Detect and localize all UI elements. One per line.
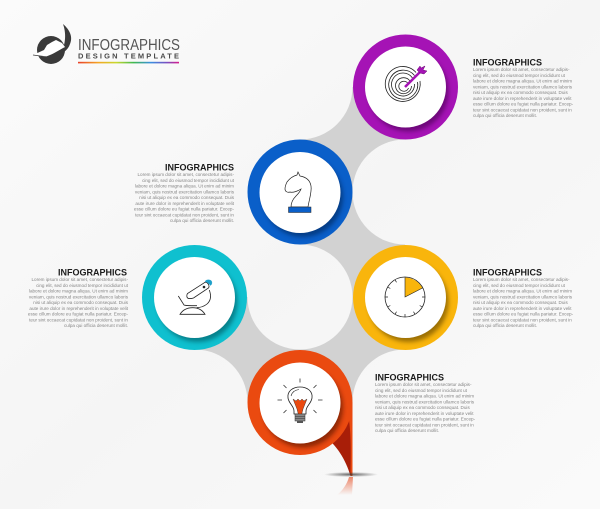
body: culpa qui officia deserunt mollit. bbox=[473, 323, 537, 328]
body: aute irure dolor in reprehenderit in voluptate velit bbox=[375, 411, 474, 416]
body: nisi ut aliquip ex ea commodo consequat. Duis bbox=[473, 300, 568, 305]
body: esse cillum dolore eu fugiat nulla pariatur. Excep- bbox=[28, 312, 128, 316]
step 3: teal ring bbox=[142, 245, 247, 350]
body: culpa qui officia deserunt mollit. bbox=[170, 218, 234, 223]
body bbox=[473, 67, 574, 118]
step 2: blue ring bbox=[248, 140, 352, 244]
body: veniam, quis nostrud exercitation ullamco laboris bbox=[375, 399, 475, 404]
heading: INFOGRAPHICS bbox=[375, 372, 444, 382]
body: labore et dolore magna aliqua. Ut enim ad minim bbox=[473, 288, 572, 294]
text block: step 2 bbox=[134, 162, 235, 223]
heading: INFOGRAPHICS bbox=[165, 162, 234, 172]
body: Lorem ipsum dolor sit amet, consectetur adipis- bbox=[473, 277, 570, 282]
pin reflection bbox=[337, 477, 353, 495]
body: labore et dolore magna aliqua. Ut enim ad minim bbox=[473, 78, 572, 84]
body: teur sint occaecat cupidatat non proident, sunt in bbox=[29, 317, 128, 322]
body: culpa qui officia deserunt mollit. bbox=[375, 428, 439, 433]
body: cing elit, sed do eiusmod tempor incididunt ut bbox=[36, 283, 129, 288]
connector band: blue to yellow bbox=[300, 192, 405, 297]
pin shadow bbox=[324, 472, 378, 477]
body: veniam, quis nostrud exercitation ullamco laboris bbox=[135, 189, 235, 194]
body: nisi ut aliquip ex ea commodo consequat. Duis bbox=[33, 300, 129, 305]
body: nisi ut aliquip ex ea commodo consequat. Duis bbox=[473, 90, 568, 95]
body: labore et dolore magna aliqua. Ut enim ad minim bbox=[29, 288, 128, 294]
body: veniam, quis nostrud exercitation ullamco laboris bbox=[473, 84, 573, 89]
body bbox=[28, 277, 129, 328]
body: aute irure dolor in reprehenderit in voluptate velit bbox=[473, 306, 572, 311]
body bbox=[134, 172, 235, 223]
logo bbox=[33, 24, 180, 64]
body: Lorem ipsum dolor sit amet, consectetur adipis- bbox=[31, 277, 128, 282]
text block: step 5 bbox=[375, 372, 476, 433]
body: nisi ut aliquip ex ea commodo consequat. Duis bbox=[375, 405, 470, 410]
body: teur sint occaecat cupidatat non proident, sunt in bbox=[135, 212, 234, 217]
body: teur sint occaecat cupidatat non proident, sunt in bbox=[375, 422, 474, 427]
icon: microscope bbox=[178, 280, 212, 314]
body: labore et dolore magna aliqua. Ut enim ad minim bbox=[135, 184, 234, 188]
step 5: orange ring bbox=[248, 350, 352, 455]
step 4: yellow ring bbox=[353, 245, 458, 350]
body: teur sint occaecat cupidatat non proident, sunt in bbox=[473, 107, 572, 112]
body: esse cillum dolore eu fugiat nulla pariatur. Excep- bbox=[134, 206, 234, 212]
connector band: yellow to orange bbox=[300, 297, 405, 402]
heading: INFOGRAPHICS bbox=[58, 266, 127, 278]
body: culpa qui officia deserunt mollit. bbox=[64, 323, 128, 328]
step 1: purple ring bbox=[353, 34, 458, 140]
body: teur sint occaecat cupidatat non proident, sunt in bbox=[473, 317, 572, 322]
body: nisi ut aliquip ex ea commodo consequat. Duis bbox=[139, 195, 235, 200]
body: veniam, quis nostrud exercitation ullamco laboris bbox=[473, 294, 573, 299]
body bbox=[473, 277, 574, 328]
icon: target bbox=[385, 66, 427, 101]
connector band: teal to orange bbox=[195, 297, 300, 402]
body: aute irure dolor in reprehenderit in voluptate velit bbox=[473, 96, 572, 101]
body: esse cillum dolore eu fugiat nulla pariatur. Excep- bbox=[473, 312, 574, 316]
body: Lorem ipsum dolor sit amet, consectetur adipis- bbox=[473, 67, 570, 72]
body: cing elit, sed do eiusmod tempor incididunt ut bbox=[473, 283, 566, 288]
body: aute irure dolor in reprehenderit in voluptate velit bbox=[29, 306, 129, 311]
text block: step 4 bbox=[473, 266, 574, 328]
pin tail bbox=[324, 402, 352, 476]
body bbox=[375, 382, 476, 433]
icon: chess knight bbox=[285, 172, 311, 212]
text block: step 3 bbox=[28, 266, 129, 328]
connector band: purple to blue bbox=[300, 87, 405, 192]
body: aute irure dolor in reprehenderit in voluptate velit bbox=[135, 201, 235, 206]
body: cing elit, sed do eiusmod tempor incididunt ut bbox=[375, 388, 468, 393]
logo subtitle: DESIGN TEMPLATE bbox=[78, 52, 179, 60]
body: veniam, quis nostrud exercitation ullamco laboris bbox=[29, 294, 129, 299]
body: culpa qui officia deserunt mollit. bbox=[473, 113, 537, 118]
logo title: INFOGRAPHICS bbox=[78, 37, 180, 54]
body: cing elit, sed do eiusmod tempor incididunt ut bbox=[473, 73, 566, 78]
body: Lorem ipsum dolor sit amet, consectetur adipis- bbox=[375, 382, 472, 387]
heading: INFOGRAPHICS bbox=[473, 266, 542, 278]
body: cing elit, sed do eiusmod tempor incididunt ut bbox=[142, 178, 235, 183]
body: esse cillum dolore eu fugiat nulla pariatur. Excep- bbox=[375, 416, 476, 422]
logo mark bbox=[33, 24, 71, 64]
heading: INFOGRAPHICS bbox=[473, 56, 542, 68]
icon: clock bbox=[385, 277, 425, 317]
body: labore et dolore magna aliqua. Ut enim ad minim bbox=[375, 394, 474, 398]
rainbow rule bbox=[78, 62, 179, 63]
icon: light bulb bbox=[278, 378, 322, 423]
text block: step 1 bbox=[473, 56, 574, 118]
body: esse cillum dolore eu fugiat nulla pariatur. Excep- bbox=[473, 102, 574, 106]
body: Lorem ipsum dolor sit amet, consectetur adipis- bbox=[137, 172, 234, 177]
